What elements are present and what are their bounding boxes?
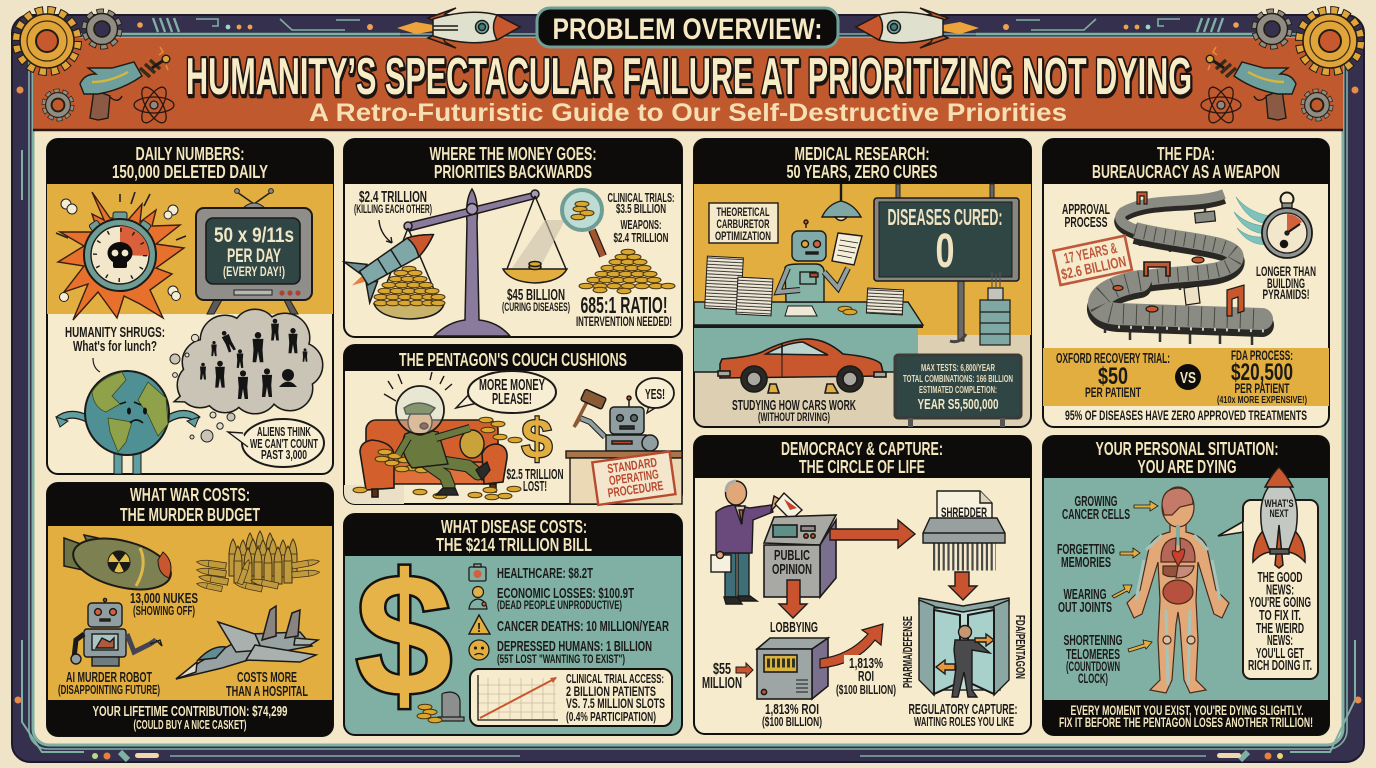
footer: every moment [1059, 702, 1313, 730]
label: wearing out joints [1058, 585, 1132, 616]
icon: shrugging earth [56, 371, 199, 474]
comparison: oxford trial: OXFORD RECOVERY TRIAL: [1056, 351, 1170, 367]
dashboard: test stats: ESTIMATED COMPLETION: [919, 384, 997, 396]
text: 2.5 trillion lost: LOST! [523, 478, 547, 495]
callout: aliens think [228, 419, 324, 467]
icon: magnifying glass [562, 190, 603, 256]
text: healthcare: HEALTHCARE: $8.2T [497, 565, 593, 582]
text: pharma defense: PHARMA/DEFENSE [900, 616, 915, 688]
callout: good news bubble: NEWS: [1266, 582, 1294, 598]
panel: democracy and capture [694, 436, 1031, 734]
icon: ai murder robot [71, 598, 162, 666]
sign: theoretical carburetor optimization: CARBURETOR [716, 217, 770, 231]
icon: sad face [469, 640, 489, 660]
text: fda pentagon: FDA/PENTAGON [1013, 615, 1028, 679]
text: robot caption: AI MURDER ROBOT [66, 669, 152, 686]
comparison: fda process: FDA PROCESS: [1231, 347, 1293, 363]
icon: what's next rocket: WHAT'S [1264, 498, 1294, 510]
icon: rocket right [856, 8, 979, 48]
panel: what disease costs [344, 514, 682, 735]
callout: good news bubble: THE WEIRD [1256, 621, 1304, 637]
dashboard: test stats: YEAR S5,500,000 [918, 397, 998, 413]
panel: pentagon couch cushions [344, 345, 682, 505]
callout: aliens think: WE CAN'T COUNT [250, 436, 318, 451]
chart: balance scale [374, 189, 567, 336]
tv screen: 50 x 9/11s [214, 224, 294, 247]
icon: coins on couch and floor [353, 417, 522, 500]
text: approval process: PROCESS [1064, 214, 1108, 231]
heading [112, 143, 268, 182]
icon: filing cabinet with flask [980, 272, 1010, 345]
comparison: oxford trial [1056, 351, 1170, 400]
text: 55 million [702, 661, 742, 692]
text: jet caption: COSTS MORE [237, 669, 297, 686]
heading: WHAT DISEASE COSTS: [441, 516, 587, 537]
text: 2.5 trillion lost [506, 466, 564, 495]
icon: dollar sign: $ [521, 407, 553, 470]
icon: ceiling lamp [822, 184, 861, 220]
icon: nuke [64, 530, 176, 598]
comparison: fda process: PER PATIENT [1234, 380, 1290, 396]
heading: WHAT WAR COSTS: [130, 484, 250, 505]
heading [436, 516, 592, 555]
label: wearing out joints: WEARING [1064, 587, 1106, 603]
desk and procedure stamp [566, 451, 682, 505]
dashboard: test stats [895, 355, 1021, 427]
label: shortening telomeres: SHORTENING [1064, 633, 1122, 649]
text: regulatory capture [908, 701, 1018, 729]
arrow: ballots to shredder [830, 520, 915, 548]
icon: exploding stopwatch [56, 192, 186, 320]
text: roi by arrow: 1,813% [849, 655, 883, 672]
comparison: fda process: $20,500 [1231, 359, 1293, 386]
dashboard: test stats: MAX TESTS: 6,800/YEAR [921, 362, 995, 374]
callout: good news bubble: RICH DOING IT. [1248, 658, 1312, 674]
icon: general in space helmet [384, 372, 490, 495]
heading: YOU ARE DYING [1138, 456, 1236, 477]
text: longer than pyramids: LONGER THAN [1256, 263, 1316, 279]
text: regulatory capture: WAITING ROLES YOU LIKE [914, 715, 1014, 729]
text: studying how cars work: STUDYING HOW CARS WORK [732, 397, 856, 414]
label: shortening telomeres: (COUNTDOWN [1066, 659, 1120, 674]
heading: MEDICAL RESEARCH: [794, 143, 930, 164]
callout: aliens think: PAST 3,000 [261, 447, 307, 462]
text: studying how cars work [732, 397, 856, 424]
arrow: shredder to door [949, 572, 977, 600]
label: forgetting memories: MEMORIES [1061, 555, 1111, 571]
icon: public opinion machine: PUBLIC [774, 547, 810, 564]
panel: where the money goes [339, 139, 682, 337]
heading [1096, 438, 1278, 477]
panel: daily numbers [47, 139, 333, 474]
text: studying how cars work: (WITHOUT DRIVING) [758, 410, 830, 424]
callout: 685 to 1 ratio: INTERVENTION NEEDED! [576, 314, 672, 329]
text: 2.4 trillion label [354, 189, 432, 243]
icon: tombstone and coins [417, 692, 464, 723]
callout: yes: YES! [645, 386, 665, 403]
icon: revolving door [919, 598, 1009, 697]
icon: what's next rocket: NEXT [1270, 508, 1289, 520]
callout: good news bubble: YOU'RE GOING [1249, 595, 1311, 611]
sign: theoretical carburetor optimization [709, 203, 778, 243]
text: 55 million: MILLION [702, 675, 742, 692]
heading [120, 484, 260, 525]
heading: 150,000 DELETED DAILY [112, 161, 268, 182]
display board: diseases cured [874, 184, 1019, 342]
label: shortening telomeres: TELOMERES [1066, 647, 1120, 663]
display board: diseases cured: DISEASES CURED: [888, 204, 1002, 230]
text: cancer deaths: CANCER DEATHS: 10 MILLION/YEAR [497, 618, 669, 635]
text: robot caption [58, 669, 160, 697]
heading: THE $214 TRILLION BILL [436, 534, 592, 555]
icon: bullet pile [196, 531, 320, 592]
callout: clinical trial access chart: VS. 7.5 MILLION SLOTS [566, 696, 665, 711]
callout: clinical trial access chart [470, 669, 672, 726]
callout: more money please [456, 371, 556, 413]
sign: theoretical carburetor optimization: THEORETICAL [716, 205, 770, 219]
top band circuit right [976, 18, 1256, 34]
tv screen: (EVERY DAY!) [223, 263, 285, 279]
panel: medical research [694, 139, 1031, 427]
text: clinical trials vs weapons: CLINICAL TRIALS: [608, 190, 674, 205]
heading: THE MURDER BUDGET [120, 504, 260, 525]
icon: small gray gear top right [1255, 12, 1289, 46]
icon: ray gun right [1206, 47, 1296, 120]
text: 2.4 trillion label: $2.4 TRILLION [359, 189, 427, 206]
arrow: money into machine [736, 663, 753, 677]
icon: public opinion machine [764, 515, 836, 597]
label: forgetting memories: FORGETTING [1057, 542, 1115, 558]
text: 45 billion label [502, 287, 570, 314]
callout: 685 to 1 ratio: 685:1 RATIO! [580, 292, 668, 318]
tv screen: PER DAY [227, 246, 281, 267]
heading: YOUR PERSONAL SITUATION: [1096, 438, 1278, 459]
top band circuit left [120, 18, 400, 34]
text: roi under machine: 1,813% ROI [765, 701, 819, 718]
text: 45 billion label: (CURING DISEASES) [502, 302, 570, 314]
icon: gavel robot at desk [574, 389, 658, 451]
icon: fighter jet [176, 606, 318, 679]
callout: clinical trial access chart: (0.4% PARTICIPATION) [566, 709, 656, 724]
text: humanity shrugs: HUMANITY SHRUGS: [65, 324, 165, 341]
icon: public opinion machine: OPINION [772, 561, 812, 578]
icon: small gray gear top left [85, 12, 119, 46]
text: clinical trials vs weapons [608, 190, 674, 245]
text: economic losses [497, 585, 634, 612]
text: humanity shrugs: What's for lunch? [73, 338, 157, 355]
callout: 685 to 1 ratio [576, 292, 672, 329]
heading: 50 YEARS, ZERO CURES [786, 161, 938, 182]
icon: robot researcher [778, 220, 862, 302]
callout: good news bubble: THE GOOD [1258, 570, 1302, 586]
label: shortening telomeres: CLOCK) [1078, 671, 1108, 686]
heading [781, 438, 943, 477]
text: nukes: (SHOWING OFF) [133, 603, 195, 618]
icon: warning triangle: ! [477, 620, 481, 635]
subtitle: A Retro-Futuristic Guide to Our Self-Destructive Priorities [309, 99, 1067, 127]
arrow: curved roi [820, 624, 883, 668]
icon: winged stopwatch [1234, 192, 1312, 258]
callout: aliens think: ALIENS THINK [257, 424, 311, 439]
callout: good news bubble: TO FIX IT. [1259, 608, 1301, 624]
icon: conveyor belt [1099, 194, 1268, 345]
callout: good news bubble: YOU'LL GET [1256, 646, 1304, 662]
icon: person losses [469, 586, 487, 609]
text: roi by arrow [836, 655, 896, 697]
callout: clinical trial access chart: 2 BILLION PATIENTS [566, 684, 656, 699]
text: humanity shrugs [65, 324, 165, 372]
icon: orange couch [360, 420, 507, 497]
icon: large gear left [17, 11, 77, 71]
icon: small gear lower right [1303, 91, 1331, 119]
comparison: oxford trial: PER PATIENT [1085, 384, 1141, 400]
label: wearing out joints: OUT JOINTS [1058, 600, 1112, 616]
icon: atom left [134, 84, 174, 126]
text: longer than pyramids: BUILDING [1267, 275, 1305, 291]
icon: paper stacks [705, 256, 904, 316]
heading [786, 143, 938, 182]
stamp: 17 years: 17 YEARS & [1062, 240, 1119, 268]
icon: shredder: SHREDDER [941, 504, 987, 520]
heading: BUREAUCRACY AS A WEAPON [1092, 161, 1280, 182]
heading: WHERE THE MONEY GOES: [430, 143, 596, 164]
text: lobbying: LOBBYING [770, 619, 818, 636]
arrow: opinion to lobbying [779, 580, 807, 618]
text: roi by arrow: ($100 BILLION) [836, 683, 896, 697]
heading: PRIORITIES BACKWARDS [434, 161, 592, 182]
display board: diseases cured: 0 [936, 225, 954, 278]
text: roi by arrow: ROI [858, 668, 874, 685]
icon: small gear lower left [44, 91, 72, 119]
coin pile left [374, 266, 445, 306]
icon: rocket on the scale [339, 214, 446, 306]
icon: shredder [923, 491, 1005, 557]
icon: lobbying machine [757, 638, 828, 699]
thought cloud with silhouettes [170, 310, 322, 442]
text: 2.5 trillion lost: $2.5 TRILLION [506, 466, 564, 483]
text: depressed humans: DEPRESSED HUMANS: 1 BILLION [497, 638, 652, 655]
text: depressed humans [497, 638, 652, 666]
header banner [33, 38, 1343, 130]
callout: clinical trial access chart: CLINICAL TRIAL ACCESS: [566, 672, 664, 686]
coin pile right [579, 249, 675, 294]
text: nukes [130, 590, 198, 618]
label: forgetting memories [1057, 542, 1140, 571]
icon: large gear right [1300, 11, 1360, 71]
text: roi under machine: ($100 BILLION) [762, 715, 822, 729]
dashboard: test stats: TOTAL COMBINATIONS: 166 BILLION [903, 373, 1013, 385]
tv screen [196, 189, 312, 314]
badge: versus: VS [1180, 370, 1196, 387]
icon: what's next rocket [1253, 467, 1305, 568]
text: approval process: APPROVAL [1062, 201, 1110, 218]
heading: THE PENTAGON'S COUCH CUSHIONS [399, 349, 627, 370]
callout: good news bubble [1218, 500, 1318, 679]
text: clinical trials vs weapons: $2.4 TRILLION [614, 230, 668, 245]
icon: red tape gates on conveyor [1113, 192, 1244, 316]
footer: lifetime contribution: YOUR LIFETIME CONTRIBUTION: $74,299 [92, 703, 288, 720]
icon: warning triangle [469, 615, 490, 635]
label: growing cancer cells [1062, 494, 1158, 523]
callout: more money please: PLEASE! [492, 391, 532, 408]
heading: DEMOCRACY & CAPTURE: [781, 438, 943, 459]
comparison: fda process: (410x MORE EXPENSIVE!) [1217, 394, 1307, 406]
heading: DAILY NUMBERS: [136, 143, 244, 164]
stamp: 17 years [1053, 236, 1132, 285]
text: economic losses: ECONOMIC LOSSES: $100.9T [497, 585, 634, 602]
text: clinical trials vs weapons: WEAPONS: [620, 217, 662, 232]
icon: ray gun left [80, 47, 170, 120]
icon: human anatomy [1127, 487, 1229, 693]
icon: giant dollar sign: $ [356, 537, 452, 732]
text: approval process [1062, 201, 1110, 231]
heading [1092, 143, 1280, 182]
text: depressed humans: (55T LOST "WANTING TO EXIST") [497, 654, 625, 666]
heading: THE FDA: [1157, 143, 1215, 164]
icon: atom right [1201, 84, 1241, 126]
text: 55 million: $55 [713, 661, 731, 678]
text: 2.4 trillion label: (KILLING EACH OTHER) [354, 204, 432, 216]
callout: yes [636, 378, 674, 413]
badge: versus [1175, 364, 1201, 390]
desk and procedure stamp: OPERATING [608, 466, 660, 488]
text: robot caption: (DISAPPOINTING FUTURE) [58, 682, 160, 697]
text: clinical trials vs weapons: $3.5 BILLION [616, 201, 666, 216]
footer: lifetime contribution: (COULD BUY A NICE CASKET) [134, 717, 246, 732]
callout: more money please: MORE MONEY [479, 377, 545, 394]
sign: theoretical carburetor optimization: OPTIMIZATION [715, 229, 771, 243]
icon: orange car on jacks [718, 339, 886, 393]
panel: your personal situation [1043, 436, 1329, 735]
text: jet caption: THAN A HOSPITAL [226, 683, 308, 700]
text: nukes: 13,000 NUKES [130, 590, 198, 607]
stamp: 17 years: $2.6 BILLION [1060, 253, 1128, 283]
desk and procedure stamp: STANDARD [606, 454, 658, 476]
icon: rocket left [397, 8, 520, 48]
heading [430, 143, 596, 182]
footer: lifetime contribution [92, 703, 288, 732]
comparison: oxford trial: $50 [1098, 363, 1128, 390]
panel: the fda [1043, 139, 1329, 427]
text: jet caption [226, 669, 308, 700]
desk and procedure stamp: PROCEDURE [607, 478, 664, 500]
comparison: fda process [1217, 347, 1307, 406]
panel: what war costs [47, 483, 333, 736]
text: economic losses: (DEAD PEOPLE UNPRODUCTIVE) [497, 600, 622, 612]
label: growing cancer cells: GROWING [1074, 494, 1118, 510]
overview pill: PROBLEM OVERVIEW: [552, 13, 822, 46]
text: 45 billion label: $45 BILLION [507, 287, 565, 304]
text: roi under machine [762, 701, 822, 729]
label: growing cancer cells: CANCER CELLS [1062, 507, 1130, 523]
callout: good news bubble: NEWS: [1267, 633, 1293, 649]
text: longer than pyramids: PYRAMIDS! [1262, 286, 1310, 302]
icon: politician [711, 481, 802, 604]
text: regulatory capture: REGULATORY CAPTURE: [908, 701, 1018, 718]
heading: THE CIRCLE OF LIFE [799, 456, 925, 477]
label: shortening telomeres [1064, 633, 1152, 686]
text: longer than pyramids [1256, 263, 1316, 302]
icon: first aid kit [469, 564, 486, 581]
